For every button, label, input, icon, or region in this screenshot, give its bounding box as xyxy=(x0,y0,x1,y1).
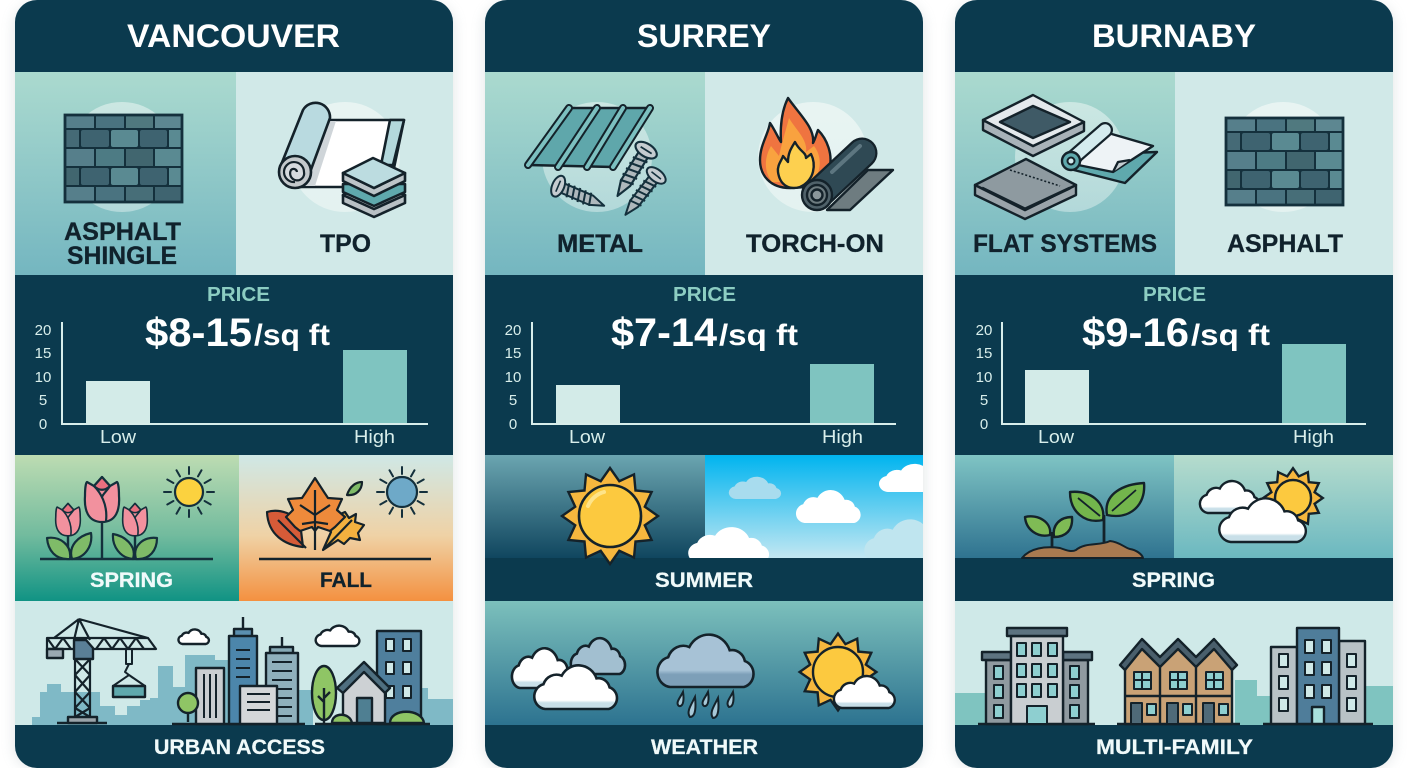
skyline silhouette xyxy=(32,655,453,725)
icon: apartment block xyxy=(978,628,1095,724)
price value xyxy=(1082,311,1270,355)
panel: spring season xyxy=(15,455,239,601)
bar chart: High xyxy=(822,427,863,447)
icon: townhouses xyxy=(1117,639,1240,724)
bar chart: 5 xyxy=(509,392,517,409)
bar chart: 20 xyxy=(976,322,992,339)
icon: autumn leaves xyxy=(259,478,431,559)
panel: fall season xyxy=(239,455,453,601)
bar chart: Low xyxy=(569,427,606,447)
panel: metal xyxy=(485,72,705,275)
panel: price chart Vancouver xyxy=(35,284,428,447)
panel: weather xyxy=(485,601,923,759)
label: spring: SPRING xyxy=(90,569,173,592)
bar chart: High xyxy=(354,427,395,447)
price heading: PRICE xyxy=(673,284,736,306)
icon: spring sun xyxy=(164,467,214,517)
panel: summer season xyxy=(485,455,950,592)
label: metal: METAL xyxy=(557,230,643,258)
background silhouette xyxy=(955,680,1393,725)
price value: $7-14 xyxy=(611,311,718,355)
label: TPO: TPO xyxy=(320,230,371,258)
bar chart: 0 xyxy=(509,416,517,433)
label: summer: SUMMER xyxy=(655,569,753,592)
label: urban access: URBAN ACCESS xyxy=(154,736,325,759)
icon: city buildings xyxy=(172,617,359,724)
bar chart: 15 xyxy=(505,345,521,362)
icon: flame and roll xyxy=(760,98,893,210)
label: flat systems: FLAT SYSTEMS xyxy=(973,230,1157,258)
bar chart: 15 xyxy=(976,345,992,362)
label: asphalt shingle xyxy=(64,222,181,264)
panel: flat systems xyxy=(955,72,1175,275)
heading: Burnaby: BURNABY xyxy=(1092,18,1256,54)
icon: fall sun xyxy=(377,467,427,517)
panel: asphalt xyxy=(1175,72,1393,275)
bar chart: Low xyxy=(1038,427,1075,447)
price value: /sq ft xyxy=(254,319,330,352)
bar chart xyxy=(35,322,428,447)
icon: tulips xyxy=(40,477,213,559)
icon: TPO roll and layers xyxy=(279,103,405,217)
panel: TPO xyxy=(236,72,453,275)
icon: sun and cloud xyxy=(800,634,895,710)
bar chart: High xyxy=(1293,427,1334,447)
bar chart: 10 xyxy=(976,369,992,386)
icon: clouds xyxy=(512,638,625,709)
price value xyxy=(146,316,330,351)
price value: /sq ft xyxy=(1191,319,1270,352)
bar chart: 0 xyxy=(980,416,988,433)
icon: summer sun xyxy=(562,468,658,564)
icon: flat roof systems xyxy=(975,95,1157,219)
bar chart: 0 xyxy=(39,416,47,433)
icon: shingles xyxy=(1226,118,1343,205)
panel: Burnaby column xyxy=(955,0,1393,768)
icon: shingles xyxy=(65,115,182,202)
icon: seedlings xyxy=(1022,483,1144,558)
panel: multi-family xyxy=(955,601,1393,759)
label: torch-on: TORCH-ON xyxy=(746,230,884,258)
bar chart xyxy=(505,322,896,447)
icon: crane xyxy=(47,619,156,723)
panel: price chart Burnaby xyxy=(976,284,1366,447)
label: asphalt: ASPHALT xyxy=(1227,230,1343,258)
heading: Vancouver: VANCOUVER xyxy=(127,18,340,54)
icon: tower block xyxy=(1263,628,1373,724)
price heading: PRICE xyxy=(207,284,270,306)
price heading: PRICE xyxy=(1143,284,1206,306)
panel: Surrey column xyxy=(485,0,950,768)
bar chart: Low xyxy=(100,427,137,447)
icon: rain cloud xyxy=(657,635,754,718)
panel: Vancouver column xyxy=(15,0,453,768)
label: spring: SPRING xyxy=(1132,569,1215,592)
label: asphalt shingle: ASPHALT xyxy=(64,218,181,246)
panel: price chart Surrey xyxy=(505,284,896,447)
label: weather: WEATHER xyxy=(651,736,758,759)
icon: sky clouds xyxy=(688,464,950,564)
price value: $8-15 xyxy=(145,311,252,355)
label: fall: FALL xyxy=(320,569,372,592)
bar chart: 10 xyxy=(505,369,521,386)
price value: $9-16 xyxy=(1082,311,1189,355)
heading: Surrey: SURREY xyxy=(637,18,771,54)
panel: urban access xyxy=(15,601,453,759)
panel: torch-on xyxy=(705,72,923,275)
price value xyxy=(612,316,798,351)
bar chart: 20 xyxy=(35,322,51,339)
icon: sun behind clouds xyxy=(1200,468,1323,542)
panel: spring season Burnaby xyxy=(955,455,1393,592)
price value: /sq ft xyxy=(719,319,798,352)
bar chart: 5 xyxy=(980,392,988,409)
bar chart: 20 xyxy=(505,322,521,339)
bar chart: 10 xyxy=(35,369,51,386)
label: multi-family: MULTI-FAMILY xyxy=(1096,736,1253,759)
label: asphalt shingle: SHINGLE xyxy=(67,242,177,270)
bar chart: 5 xyxy=(39,392,47,409)
bar chart: 15 xyxy=(35,345,51,362)
panel: asphalt shingle xyxy=(15,72,236,275)
bar chart xyxy=(976,322,1366,447)
icon: metal panel and screws xyxy=(528,108,669,222)
icon: house and tree xyxy=(312,631,430,724)
